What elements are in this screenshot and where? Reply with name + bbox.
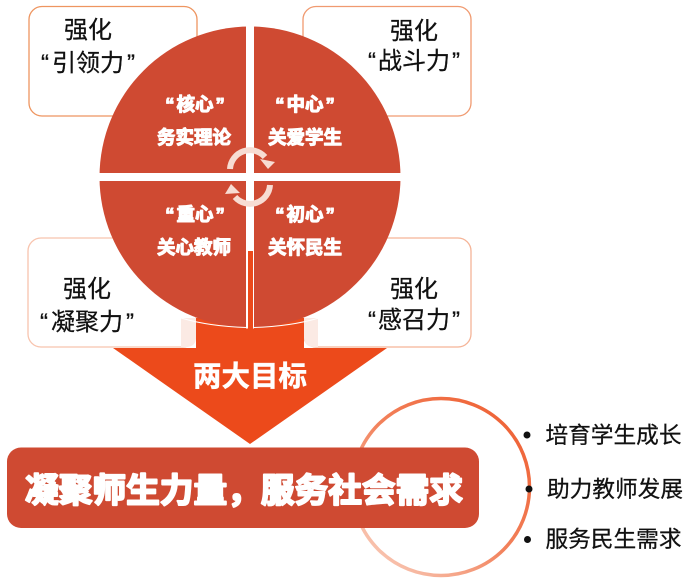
quadrant text: 初心: “初心” — [275, 204, 335, 225]
label: 强化凝聚力: 强化 — [63, 276, 111, 303]
quadrant text: 初心: 关怀民生 — [268, 237, 342, 258]
label: 强化战斗力: 强化 — [390, 18, 438, 45]
item 3: 服务民生需求 — [545, 526, 682, 552]
arrow label: 两大目标 — [193, 361, 307, 393]
box: 凝聚力 — [28, 238, 196, 347]
label: 强化凝聚力: “凝聚力” — [40, 309, 134, 336]
item 2: 助力教师发展 — [547, 476, 683, 502]
box: 战斗力 — [303, 6, 471, 116]
quadrant text: 中心: “中心” — [275, 94, 335, 115]
quadrant text: 核心 — [157, 94, 231, 148]
label: 强化战斗力: “战斗力” — [368, 48, 460, 75]
quadrant text: 重心: 关心教师 — [157, 237, 231, 258]
list: goals — [524, 422, 683, 552]
quadrant text: 重心: “重心” — [165, 204, 225, 225]
banner — [7, 448, 479, 528]
icon: cycle arrows — [225, 150, 275, 204]
box: 引领力 — [29, 6, 197, 116]
label: 强化感召力: 强化 — [390, 276, 438, 303]
label: 强化感召力: “感召力” — [368, 307, 460, 334]
quadrant text: 中心 — [268, 94, 342, 148]
quadrant text: 核心: “核心” — [165, 94, 225, 115]
quadrant text: 核心: 务实理论 — [157, 127, 231, 148]
ring outline — [352, 398, 530, 576]
arrow: 两大目标 — [113, 318, 387, 444]
quadrant text: 初心 — [268, 204, 342, 258]
label: 强化引领力: “引领力” — [41, 50, 135, 77]
quadrant text: 中心: 关爱学生 — [268, 127, 342, 148]
label: 强化引领力: 强化 — [64, 17, 112, 44]
circle quadrants — [99, 26, 401, 329]
box: 感召力 — [303, 238, 471, 347]
quadrant text: 重心 — [157, 204, 231, 258]
item 1: 培育学生成长 — [545, 422, 682, 448]
banner text: 凝聚师生力量，服务社会需求 — [25, 472, 463, 510]
